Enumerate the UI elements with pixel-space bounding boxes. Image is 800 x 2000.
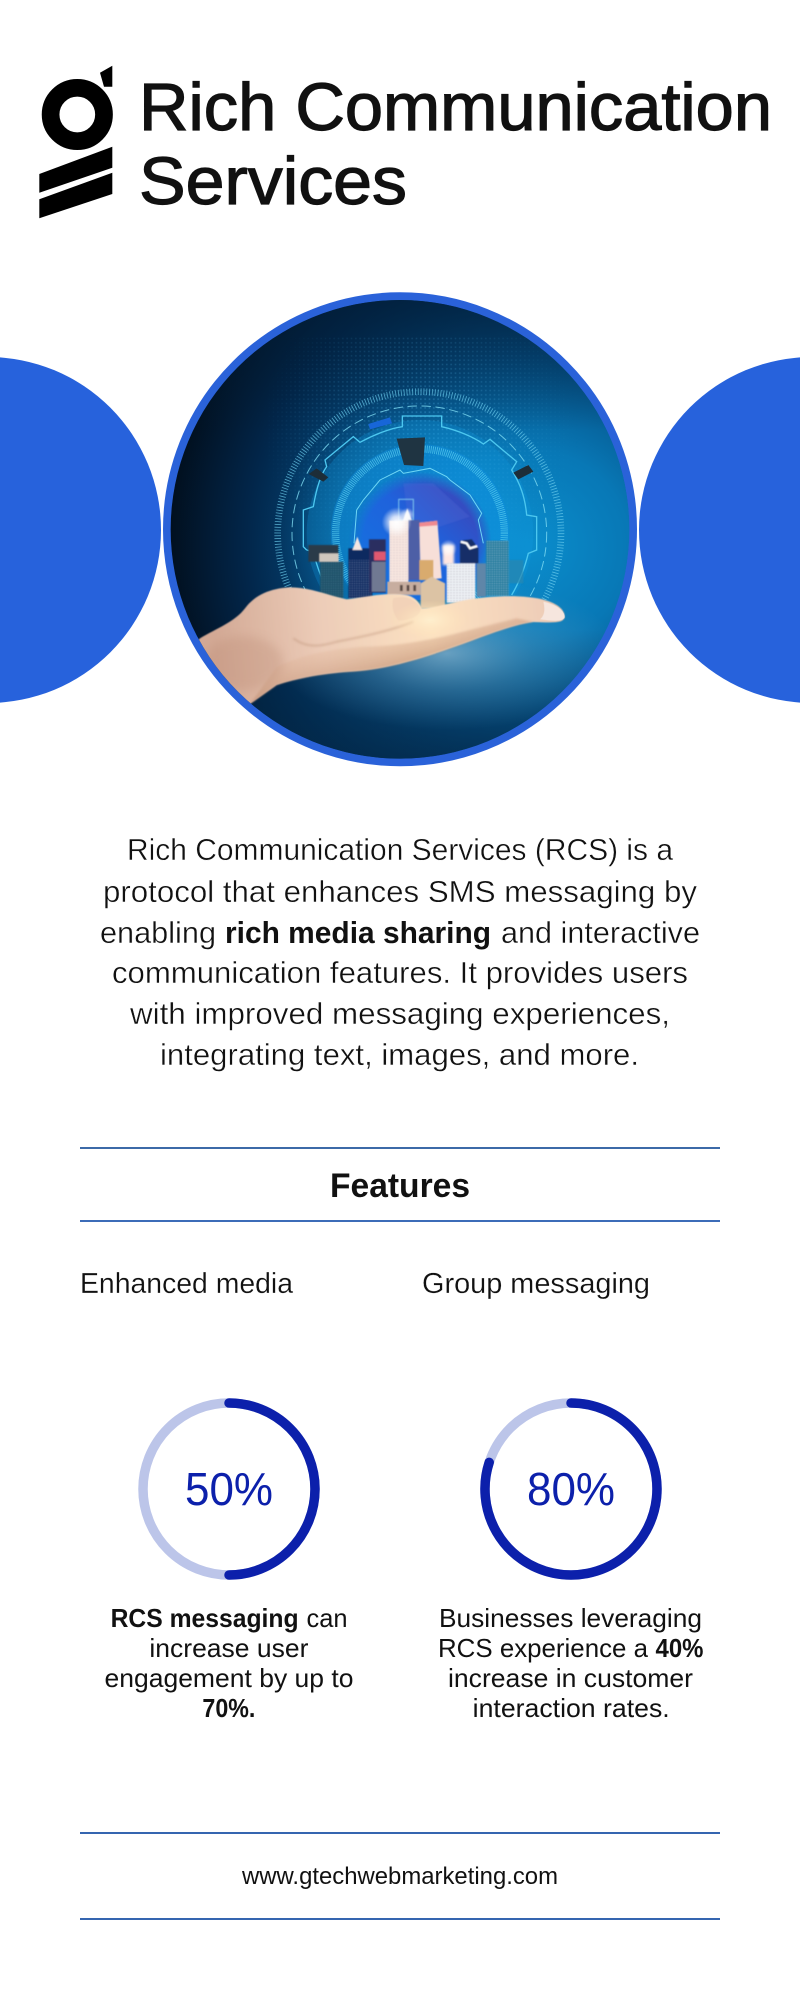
left blue half circle — [0, 357, 161, 703]
right blue half circle — [639, 357, 800, 703]
skyline, coordinates offset from crop — [308, 483, 523, 608]
intro paragraph: integrating text, images, and more. — [160, 1037, 639, 1072]
title: Rich Communication — [139, 70, 772, 145]
donut chart: 50% — [143, 1403, 315, 1575]
feature label: enhanced media: Enhanced media — [80, 1268, 294, 1300]
donut chart: 80% — [485, 1403, 657, 1575]
stat text: engagement: 70%. — [202, 1693, 255, 1723]
stat text: engagement: increase user — [149, 1633, 309, 1663]
stat text: engagement: can — [306, 1603, 348, 1633]
stat text: interaction rates: RCS experience a — [438, 1633, 649, 1663]
stat text: engagement: RCS messaging — [111, 1603, 299, 1633]
stat text: interaction rates: interaction rates. — [473, 1693, 670, 1723]
donut chart: 50%: 50% — [185, 1463, 273, 1515]
feature label: group messaging: Group messaging — [422, 1268, 650, 1300]
intro paragraph: communication features. It provides users — [112, 955, 688, 990]
intro paragraph — [100, 832, 700, 1072]
stat text: engagement: engagement by up to — [104, 1663, 354, 1693]
intro paragraph: and interactive — [501, 915, 700, 950]
intro paragraph: protocol that enhances SMS messaging by — [103, 874, 697, 909]
stat text: interaction rates: Businesses leveraging — [439, 1603, 702, 1633]
features heading with rules: Features — [330, 1167, 470, 1205]
stat text: interaction rates — [438, 1603, 704, 1723]
title — [139, 70, 772, 219]
footer with website: www.gtechwebmarketing.com — [241, 1863, 558, 1890]
stat text: interaction rates: 40% — [656, 1633, 704, 1663]
intro paragraph: with improved messaging experiences, — [129, 996, 670, 1031]
hero photo: hand holding city in a blue ring — [163, 292, 637, 766]
hand — [198, 586, 566, 704]
intro paragraph: enabling — [100, 915, 216, 950]
intro paragraph: rich media sharing — [225, 915, 491, 950]
title: Services — [139, 144, 407, 219]
stat text: interaction rates: increase in customer — [448, 1663, 693, 1693]
donut chart: 80%: 80% — [527, 1463, 615, 1515]
intro paragraph: Rich Communication Services (RCS) is a — [127, 832, 674, 867]
stat text: engagement — [104, 1603, 354, 1723]
logo mark — [39, 66, 112, 218]
